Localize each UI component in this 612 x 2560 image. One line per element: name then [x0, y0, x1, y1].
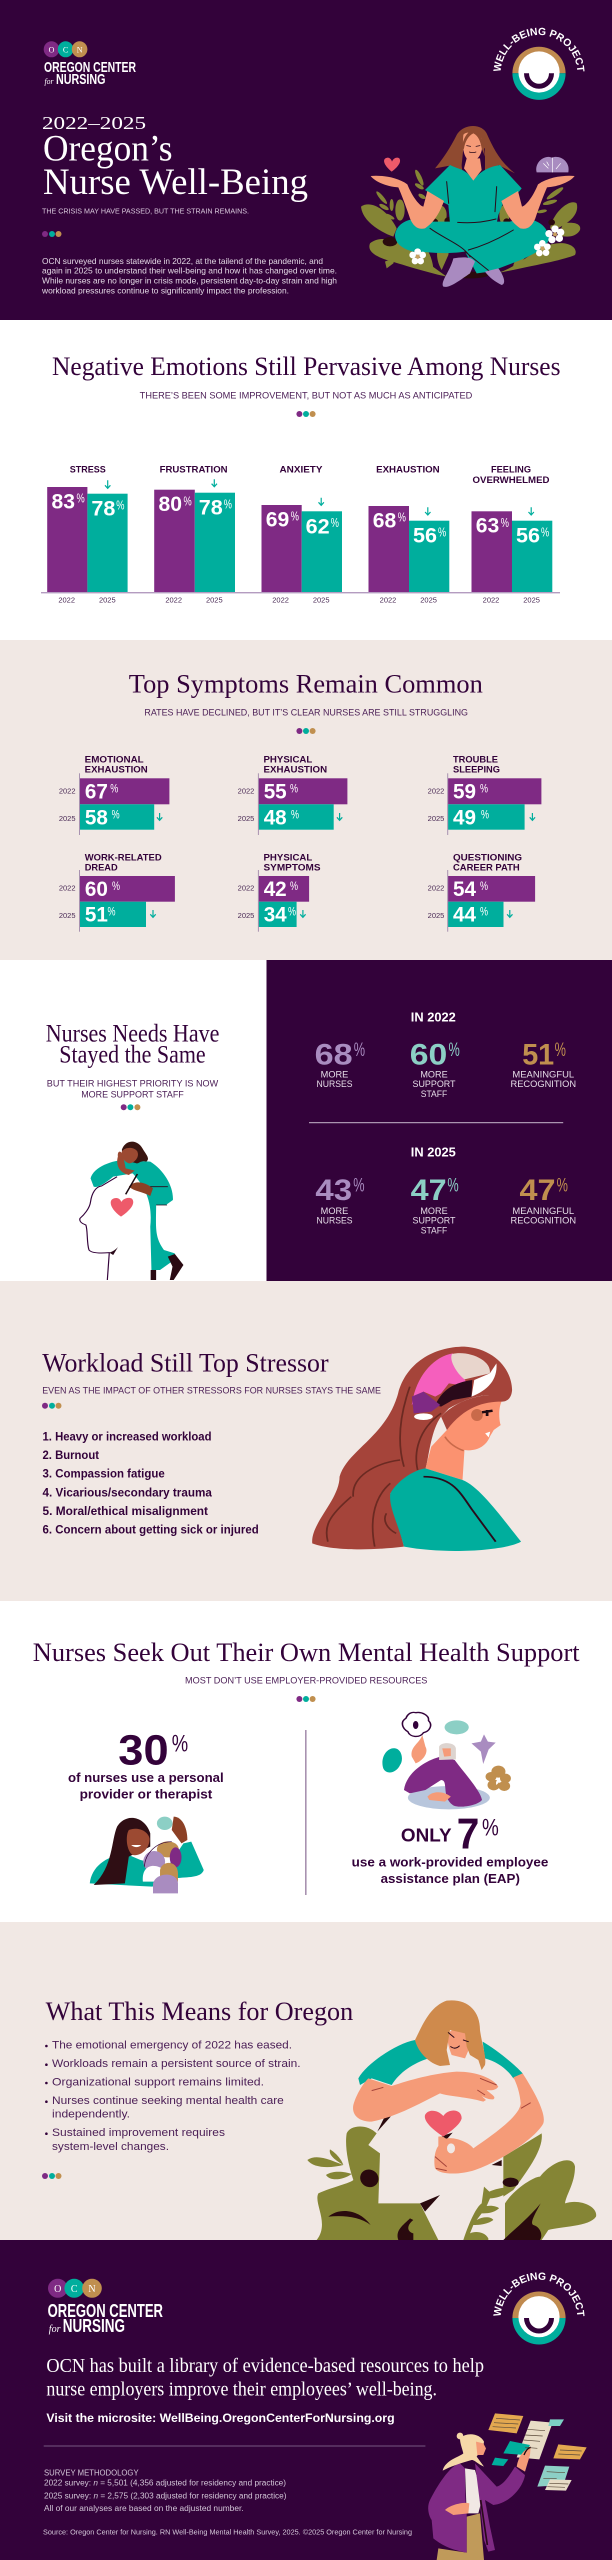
stressor list: 4. Vicarious/secondary trauma [42, 1487, 213, 1499]
stressor list: 6. Concern about getting sick or injured [42, 1524, 259, 1536]
symptom bars: 2022 [428, 884, 444, 893]
logo: Oregon Center for Nursing: NURSING [56, 71, 106, 88]
symptom bars: 2022 [428, 786, 444, 795]
stats 2025: % [353, 1176, 365, 1197]
title [42, 113, 308, 203]
symptom bars: CAREER PATH [453, 863, 520, 874]
stressor list: 2. Burnout [42, 1450, 99, 1462]
bar chart: 63 [476, 515, 499, 538]
stats 2025: 47 [411, 1174, 447, 1207]
logo: Oregon Center for Nursing [44, 41, 136, 88]
symptom bars: 2025 [238, 911, 254, 920]
bullet list: Organizational support remains limited. [52, 2076, 264, 2088]
logo: Oregon Center for Nursing: O [54, 2284, 61, 2295]
bullet list: system-level changes. [52, 2141, 169, 2153]
symptom bars: % [480, 879, 488, 893]
stats 2025: NURSES [316, 1216, 352, 1226]
symptom bars: SYMPTOMS [264, 863, 321, 874]
subtitle: THE CRISIS MAY HAVE PASSED, BUT THE STRAIN REMAINS. [42, 207, 249, 216]
bullet list: independently. [52, 2108, 130, 2120]
heading: Nurses Seek Out Their Own Mental Health Support [33, 1638, 580, 1667]
symptom bars: DREAD [85, 863, 118, 874]
bar chart [41, 465, 560, 604]
symptom bars: PHYSICAL [264, 852, 312, 863]
panel: mental health support [0, 1601, 612, 1922]
symptom bars: % [108, 905, 116, 919]
dots [296, 1696, 316, 1702]
bar chart: 2025 [313, 595, 330, 604]
dots [42, 1403, 62, 1409]
symptom bars: 60 [85, 878, 108, 901]
heading: Negative Emotions Still Pervasive Among Nurses [52, 352, 560, 381]
stressor list: 5. Moral/ethical misalignment [42, 1506, 208, 1518]
bar chart: % [398, 510, 406, 525]
heading: What This Means for Oregon [46, 1997, 353, 2026]
symptom bars: 2025 [59, 814, 76, 823]
stats 2025: MEANINGFUL [512, 1206, 574, 1216]
intro paragraph: While nurses are no longer in crisis mode, persistent day-to-day strain and high [42, 276, 337, 286]
symptom bars: 2025 [428, 911, 444, 920]
illustration: woman with documents [428, 2413, 587, 2560]
source line: Source: Oregon Center for Nursing. RN Well-Being Mental Health Survey, 2025. ©2025 Oregon Center for Nursing [43, 2528, 412, 2537]
stats 2025: 47 [520, 1174, 556, 1207]
stats 2022: RECOGNITION [510, 1079, 576, 1089]
stat: 30 percent: of nurses use a personal [68, 1770, 224, 1785]
survey methodology: SURVEY METHODOLOGY [44, 2468, 139, 2477]
symptom bars: 2022 [238, 786, 254, 795]
symptom bars: EMOTIONAL [85, 755, 144, 766]
bar chart: % [76, 491, 85, 506]
year heading 2022: IN 2022 [411, 1009, 456, 1024]
bar chart: 2022 [58, 595, 75, 604]
bar chart: 2022 [483, 595, 499, 604]
logo: Oregon Center for Nursing: OREGON CENTER [44, 59, 136, 76]
symptom bars: SLEEPING [453, 765, 500, 776]
heading: Workload Still Top Stressor [42, 1349, 329, 1378]
heading: Top Symptoms Remain Common [129, 670, 483, 699]
stats 2025: SUPPORT [412, 1216, 456, 1226]
intro paragraph [41, 257, 337, 295]
dots [296, 728, 316, 734]
intro paragraph: OCN surveyed nurses statewide in 2022, at the tailend of the pandemic, and [42, 257, 323, 266]
symptom bars: 2022 [59, 884, 76, 893]
bar chart: OVERWHELMED [472, 475, 550, 486]
panel: workload stressor [0, 1281, 612, 1601]
logo: Oregon Center for Nursing: N [88, 2284, 96, 2295]
subheading [47, 1078, 219, 1099]
stats 2025: MORE [321, 1206, 348, 1216]
bar chart: % [184, 493, 192, 508]
symptom bars: % [290, 782, 298, 796]
survey methodology [44, 2468, 287, 2513]
symptom bars: TROUBLE [453, 755, 499, 766]
stats 2022: SUPPORT [412, 1079, 456, 1089]
bar chart: STRESS [70, 465, 106, 476]
bar chart: 2022 [165, 595, 182, 604]
title: Nurse Well-Being [43, 162, 308, 203]
bar chart: % [541, 524, 550, 539]
stats 2025 [315, 1174, 576, 1236]
bar chart: EXHAUSTION [376, 465, 440, 476]
logo: Oregon Center for Nursing: NURSING [63, 2315, 125, 2336]
symptom bars: 2022 [238, 884, 254, 893]
stat: only 7 percent [352, 1809, 548, 1886]
stressor list: 3. Compassion fatigue [42, 1469, 165, 1481]
stats 2025: MORE [420, 1206, 448, 1216]
symptom bars: WORK-RELATED [85, 852, 162, 863]
panel: priorities [266, 960, 612, 1281]
dots [121, 1104, 140, 1110]
dots [296, 411, 316, 417]
stat: only 7 percent: ONLY [401, 1825, 452, 1846]
stats 2022: NURSES [316, 1079, 352, 1089]
intro paragraph: workload pressures continue to significantly impact the profession. [41, 286, 289, 295]
symptom bars: QUESTIONING [453, 852, 522, 863]
symptom bars: % [481, 807, 489, 821]
symptom bars: EXHAUSTION [264, 765, 327, 776]
bar chart: 56 [516, 525, 540, 548]
stats 2022: 68 [315, 1039, 353, 1072]
bar chart: % [224, 496, 232, 511]
bar chart: % [331, 515, 339, 530]
subheading: MORE SUPPORT STAFF [81, 1089, 184, 1099]
stats 2022: MORE [321, 1069, 348, 1079]
stats 2022: MORE [420, 1069, 448, 1079]
symptom bars: 34 [264, 904, 287, 927]
logo: Well-Being Project: WELL-BEING PROJECT [493, 28, 585, 72]
year heading 2025: IN 2025 [411, 1145, 456, 1160]
symptom bars: 2022 [59, 786, 76, 795]
logo: Oregon Center for Nursing: for [49, 2324, 61, 2335]
logo: Oregon Center for Nursing: N [77, 45, 83, 54]
symptom bars: 51 [85, 904, 108, 927]
symptom bars: % [112, 807, 120, 821]
heading: Stayed the Same [59, 1041, 206, 1068]
symptom bars: 42 [264, 878, 287, 901]
illustration: woman holding emotions [90, 1817, 204, 1893]
logo: Well-Being Project [493, 2272, 584, 2344]
symptom bars: % [290, 879, 298, 893]
stats 2022: STAFF [421, 1089, 448, 1099]
stats 2022: % [354, 1040, 365, 1061]
title: Oregon’s [43, 129, 172, 170]
symptom bars: 54 [453, 878, 476, 901]
call to action [46, 2355, 484, 2400]
stats 2025: 43 [315, 1174, 352, 1207]
logo: Oregon Center for Nursing: O [49, 45, 55, 54]
bar chart: % [116, 497, 125, 512]
microsite link: Visit the microsite: WellBeing.OregonCenterForNursing.org [46, 2411, 395, 2425]
bar chart: 2022 [380, 595, 396, 604]
survey methodology: 2022 survey: n = 5,501 (4,356 adjusted for residency and practice) [44, 2479, 286, 2488]
stats 2022: % [448, 1040, 460, 1061]
bullet list: Sustained improvement requires [52, 2127, 226, 2139]
stats 2022: 60 [410, 1039, 447, 1072]
subheading: RATES HAVE DECLINED, BUT IT’S CLEAR NURSES ARE STILL STRUGGLING [144, 708, 468, 718]
logo: Oregon Center for Nursing: for [44, 77, 54, 86]
bar chart: ANXIETY [280, 465, 323, 476]
symptom bars: 2025 [59, 911, 76, 920]
illustration: meditating nurse [361, 126, 580, 287]
symptom bars: EXHAUSTION [85, 765, 148, 776]
subheading: THERE’S BEEN SOME IMPROVEMENT, BUT NOT AS MUCH AS ANTICIPATED [140, 391, 473, 401]
stressor list [42, 1431, 259, 1536]
panel: what this means [0, 1922, 612, 2240]
symptom bars: % [110, 782, 119, 796]
illustration: nurse leaning on head [80, 1142, 183, 1280]
panel: nurses needs [0, 960, 612, 1281]
stats 2022: 51 [522, 1039, 554, 1072]
panel: footer [0, 2240, 612, 2560]
subheading: MOST DON’T USE EMPLOYER-PROVIDED RESOURCES [185, 1676, 427, 1686]
logo: Well-Being Project [493, 28, 585, 100]
dots [42, 2173, 62, 2179]
intro paragraph: again in 2025 to understand their well-being and how it has changed over time. [42, 267, 337, 276]
symptom bars: 58 [85, 806, 108, 829]
stressor list: 1. Heavy or increased workload [42, 1431, 212, 1443]
symptom bars: 67 [85, 781, 108, 804]
stat: 30 percent: % [172, 1731, 188, 1758]
bar chart: % [291, 509, 299, 524]
bar chart: FEELING [491, 465, 531, 476]
logo: Oregon Center for Nursing: OREGON CENTER [48, 2300, 163, 2321]
bar chart: 2025 [206, 595, 223, 604]
bar chart: 83 [52, 490, 75, 513]
heading [46, 1021, 219, 1068]
title: 2022–2025 [42, 113, 146, 133]
symptom bars: 2025 [238, 814, 254, 823]
stat: 30 percent: 30 [118, 1726, 169, 1774]
stat: only 7 percent: use a work-provided employee [352, 1854, 548, 1869]
bar chart: 78 [199, 497, 223, 520]
bar chart: % [501, 515, 509, 530]
bullet list: Workloads remain a persistent source of strain. [52, 2058, 301, 2070]
bar chart: 68 [373, 509, 397, 532]
stats 2025: STAFF [421, 1226, 448, 1236]
symptom bars: 2025 [428, 814, 444, 823]
illustration: woman profile with brain [312, 1347, 521, 1551]
symptom bars: % [288, 905, 296, 919]
stat: only 7 percent: assistance plan (EAP) [381, 1871, 520, 1886]
stat: 30 percent [68, 1726, 224, 1802]
symptom bars: % [480, 782, 488, 796]
bar chart: 80 [158, 493, 182, 516]
logo: Well-Being Project: WELL-BEING PROJECT [493, 2272, 584, 2316]
bar chart: 2022 [272, 595, 289, 604]
stats 2022 [315, 1039, 576, 1099]
logo: Oregon Center for Nursing: C [71, 2284, 78, 2295]
bar chart: 2025 [420, 595, 437, 604]
symptom bars: 49 [453, 806, 476, 829]
logo: Oregon Center for Nursing: C [63, 45, 68, 54]
bar chart: FRUSTRATION [160, 465, 228, 476]
bar chart: 56 [413, 525, 437, 548]
panel: negative emotions [0, 320, 612, 640]
stats 2025: RECOGNITION [510, 1216, 576, 1226]
stat: only 7 percent: % [482, 1814, 499, 1841]
bullet list [45, 2039, 301, 2153]
stats 2022: % [555, 1040, 566, 1061]
symptom bars: 48 [264, 806, 287, 829]
symptom bars: PHYSICAL [264, 755, 312, 766]
symptom bars: % [291, 807, 299, 821]
symptom bars: % [112, 879, 120, 893]
symptom bars: 55 [264, 781, 287, 804]
symptom bars: 59 [453, 781, 476, 804]
stat: only 7 percent: 7 [457, 1809, 479, 1858]
bar chart: 62 [306, 515, 330, 538]
survey methodology: All of our analyses are based on the adjusted number. [44, 2504, 244, 2513]
heading: Nurses Needs Have [46, 1021, 219, 1048]
subheading: EVEN AS THE IMPACT OF OTHER STRESSORS FOR NURSES STAYS THE SAME [42, 1385, 381, 1395]
bar chart: 78 [91, 498, 116, 521]
logo: Oregon Center for Nursing [48, 2279, 163, 2336]
bar chart: 2025 [523, 595, 540, 604]
illustration: woman with emotion blobs [382, 1712, 511, 1809]
bar chart: % [438, 524, 447, 539]
symptom bars: % [480, 905, 488, 919]
call to action: nurse employers improve their employees’ well-being. [46, 2378, 437, 2400]
panel: hero [0, 0, 612, 320]
dots [42, 231, 62, 237]
panel: top symptoms [0, 640, 612, 960]
symptom bars [59, 755, 541, 932]
subheading: BUT THEIR HIGHEST PRIORITY IS NOW [47, 1078, 219, 1088]
stats 2022: MEANINGFUL [512, 1069, 574, 1079]
illustration: nurse hugging head with heart [307, 2000, 596, 2240]
stats 2025: % [447, 1176, 459, 1197]
bar chart: 69 [266, 508, 289, 531]
bullet list: The emotional emergency of 2022 has eased. [52, 2039, 292, 2051]
call to action: OCN has built a library of evidence-based resources to help [46, 2355, 484, 2377]
stat: 30 percent: provider or therapist [80, 1787, 213, 1802]
bar chart: 2025 [99, 595, 116, 604]
bullet list: Nurses continue seeking mental health care [52, 2095, 284, 2107]
survey methodology: 2025 survey: n = 2,575 (2,303 adjusted for residency and practice) [44, 2491, 287, 2500]
symptom bars: 44 [453, 904, 476, 927]
stats 2025: % [557, 1176, 568, 1197]
